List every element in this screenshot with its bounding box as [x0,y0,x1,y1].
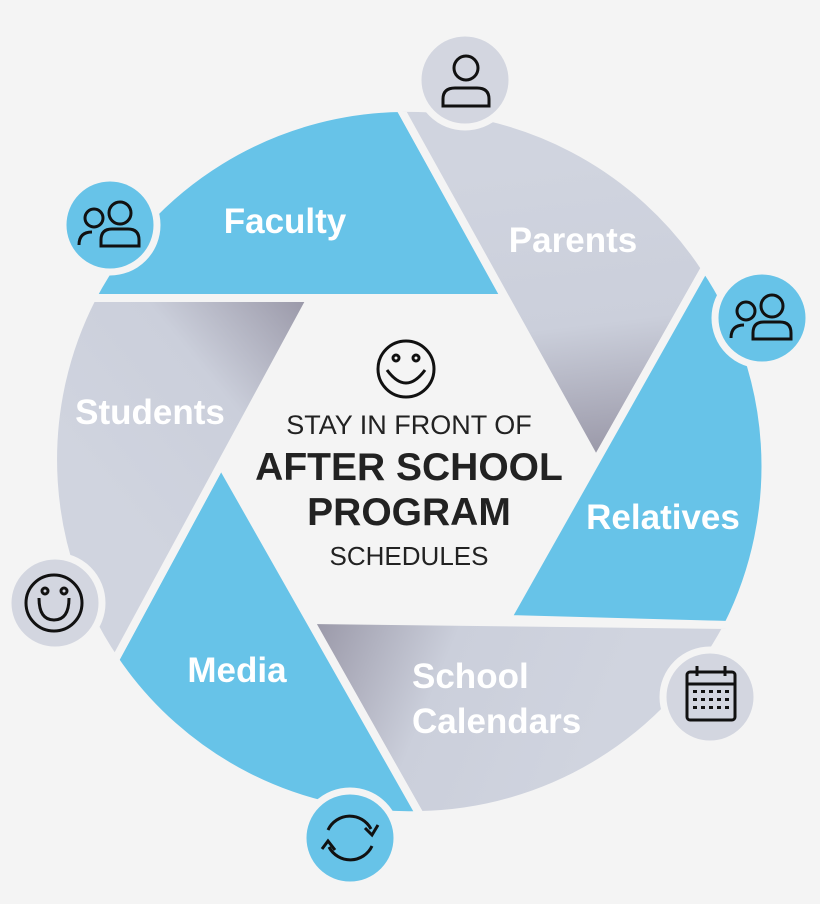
icon: faculty group [63,178,157,272]
blade: Faculty [92,108,505,298]
center text [255,410,563,571]
blade: School Calendars [310,620,728,815]
blade: Media [115,464,420,815]
blade: Media: Media [187,651,287,690]
blade: Faculty: Faculty [224,202,347,241]
blade: Parents [400,108,705,461]
center text: STAY IN FRONT OF [286,410,532,440]
icon: students smiley [8,556,102,650]
icon: calendar [663,650,757,744]
center text: SCHEDULES [330,541,488,571]
blade: Relatives [507,268,765,625]
center text: PROGRAM [307,491,511,534]
blade: Students [53,298,311,660]
blade: Students: Students [75,393,225,432]
blade: School Calendars: Calendars [412,702,581,741]
blade: Relatives: Relatives [586,498,740,537]
icon: parent person [418,33,512,127]
blade: School Calendars: School [412,657,529,696]
icon: refresh arrows [303,791,397,885]
center text: AFTER SCHOOL [255,446,563,489]
center hexagon [221,298,596,620]
icon: relatives group [715,271,809,365]
icon: center smiley [378,341,434,397]
blade: Parents: Parents [509,221,637,260]
